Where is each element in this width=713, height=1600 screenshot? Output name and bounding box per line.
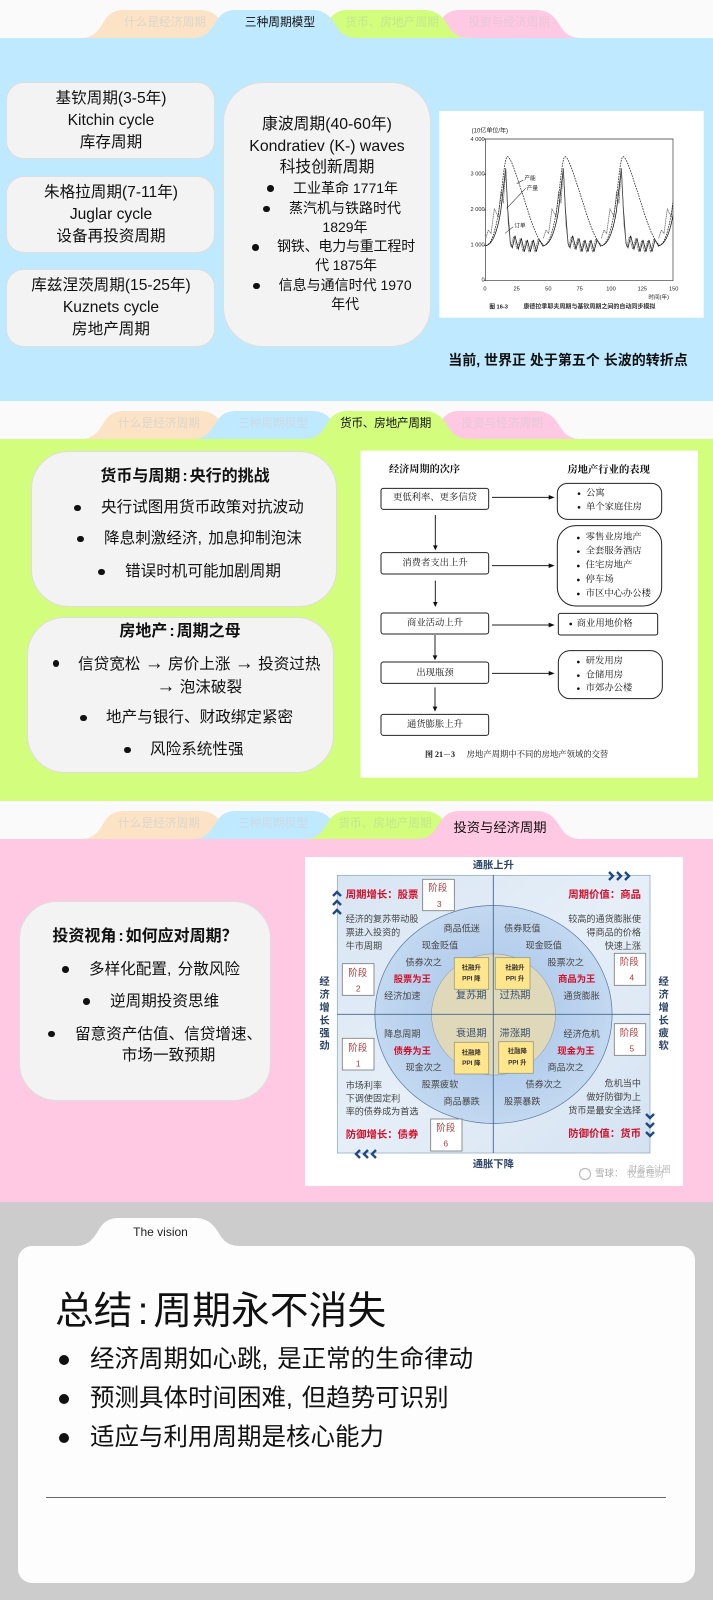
- chart: Kondratiev and Kitchin simulation: 时间(年): [648, 293, 669, 301]
- section: three cycle models: [0, 0, 713, 401]
- diagram: investment clock: 阶段: [620, 956, 639, 968]
- diagram: real estate sequence: 商业用地价格: [577, 617, 633, 629]
- diagram: investment clock: 疲: [658, 1026, 669, 1040]
- diagram: investment clock: 增: [319, 1001, 330, 1014]
- list item: 市场一致预期: [122, 1047, 215, 1064]
- list item: 逆周期投资思维: [110, 992, 219, 1010]
- diagram: investment clock: 票进入投资的: [346, 927, 400, 938]
- chart: Kondratiev and Kitchin simulation: 3 000: [471, 171, 485, 177]
- diagram: investment clock: 社融降: [462, 1048, 481, 1056]
- diagram: investment clock: 复苏期: [456, 988, 487, 1002]
- diagram: investment clock: 防御增长：债券: [346, 1128, 419, 1141]
- chart: Kondratiev and Kitchin simulation: 100: [606, 286, 616, 292]
- diagram: investment clock: 得商品的价格: [586, 927, 641, 938]
- card: money and the cycle: [31, 451, 337, 607]
- tab bar: [82, 811, 579, 839]
- diagram: investment clock: 通货膨胀: [564, 990, 600, 1001]
- diagram: investment clock: 债券次之: [406, 956, 442, 967]
- card heading: 康波周期(40-60年): [262, 116, 392, 133]
- card: Kuznets cycle: 库兹涅茨周期(15-25年): [31, 277, 191, 294]
- tab bar: 三种周期模型: [245, 16, 315, 29]
- list item: 多样化配置, 分散风险: [89, 960, 240, 978]
- diagram: real estate sequence: 市区中心办公楼: [586, 587, 652, 599]
- card heading: Kondratiev (K-) waves: [249, 138, 405, 154]
- chart: Kondratiev and Kitchin simulation: 1 000: [471, 243, 485, 249]
- list item: [263, 198, 401, 237]
- diagram: investment clock: PPI 降: [462, 1058, 481, 1067]
- chart: Kondratiev and Kitchin simulation: 康德拉季耶夫周期与基钦周期之间的自动同步模拟: [523, 303, 655, 311]
- diagram: real estate sequence: 经济周期的次序: [389, 462, 460, 476]
- chart: Kondratiev and Kitchin simulation: 0: [483, 286, 487, 292]
- card heading: 房地产:周期之母: [119, 623, 241, 640]
- diagram: investment clock: 下调使固定利: [346, 1092, 400, 1103]
- diagram: investment clock: 股票为王: [394, 973, 431, 984]
- list item: 适应与利用周期是核心能力: [90, 1424, 384, 1451]
- diagram: investment clock: 济: [658, 988, 669, 1001]
- diagram: investment clock: 阶段: [428, 882, 448, 894]
- diagram: real estate sequence: 研发用房: [586, 655, 623, 667]
- chart: Kondratiev and Kitchin simulation: 25: [514, 286, 520, 292]
- diagram: investment clock: 阶段: [348, 967, 368, 979]
- diagram: investment clock: 通胀上升: [473, 858, 514, 872]
- chart: Kondratiev and Kitchin simulation: 125: [638, 286, 647, 292]
- tab bar: 投资与经济周期: [461, 417, 543, 430]
- diagram: investment clock: 快速上涨: [605, 940, 641, 951]
- diagram: investment clock: 降息周期: [384, 1028, 420, 1039]
- section: summary: [0, 1202, 713, 1600]
- tab bar: 货币、房地产周期: [340, 417, 431, 430]
- diagram: investment clock: 通胀下降: [473, 1158, 515, 1170]
- diagram: investment clock: 经济危机: [564, 1028, 600, 1039]
- diagram: investment clock: 现金为王: [557, 1045, 595, 1056]
- list item: → 泡沫破裂: [156, 676, 242, 696]
- diagram: real estate sequence: 更低利率、更多信贷: [393, 491, 478, 503]
- tab bar: [82, 10, 579, 38]
- diagram: investment clock: 长: [658, 1014, 669, 1027]
- card heading: 货币与周期:央行的挑战: [100, 468, 270, 485]
- diagram: real estate sequence: 公寓: [586, 486, 605, 498]
- diagram: real estate sequence: 零售业房地产: [586, 531, 642, 543]
- tab bar: 货币、房地产周期: [345, 16, 439, 29]
- diagram: investment clock: 股票次之: [548, 956, 584, 967]
- card: Kuznets cycle: [6, 269, 215, 347]
- diagram: real estate sequence: 住宅房地产: [586, 559, 632, 571]
- section: money and real estate: [0, 401, 713, 801]
- tab: The vision: [78, 1218, 238, 1246]
- card: Juglar cycle: 设备再投资周期: [56, 228, 166, 244]
- card heading: 投资视角:如何应对周期？: [52, 928, 238, 945]
- diagram: investment clock: 股票疲软: [422, 1078, 458, 1089]
- diagram: investment clock: 济: [319, 988, 330, 1001]
- diagram: investment clock: 现金次之: [406, 1062, 442, 1073]
- card: Kitchin cycle: [6, 82, 215, 159]
- chart: Kondratiev and Kitchin simulation: 产能: [524, 174, 536, 182]
- diagram: investment clock: 牛市周期: [346, 940, 382, 951]
- list item: 降息刺激经济, 加息抑制泡沫: [104, 530, 302, 547]
- list item: 工业革命 1771年: [293, 180, 398, 196]
- diagram: investment clock: 长: [319, 1014, 330, 1027]
- diagram: investment clock: 5: [629, 1043, 634, 1053]
- diagram: investment clock: 软: [658, 1039, 669, 1052]
- diagram: investment clock: 债券贬值: [504, 923, 540, 934]
- diagram: real estate sequence: 通货膨胀上升: [407, 718, 463, 730]
- tab bar: [82, 411, 579, 439]
- diagram: investment clock: 阶段: [348, 1042, 368, 1054]
- diagram: investment clock: 滞涨期: [500, 1028, 530, 1040]
- diagram: investment clock: 周期价值：商品: [568, 888, 641, 901]
- list item: 代 1875年: [315, 257, 377, 273]
- diagram: investment clock: 社融升: [505, 962, 525, 972]
- diagram: real estate sequence: 出现瓶颈: [416, 666, 454, 678]
- diagram: investment clock: 牧童理财: [627, 1168, 664, 1179]
- list item: 蒸汽机与铁路时代: [289, 200, 401, 216]
- tab bar: 什么是经济周期: [118, 817, 200, 830]
- list item: 错误时机可能加剧周期: [125, 563, 281, 580]
- chart: Kondratiev and Kitchin simulation: (10亿单位/年): [472, 127, 508, 135]
- diagram: investment clock: 现金贬值: [526, 940, 562, 951]
- diagram: real estate sequence: 停车场: [586, 573, 614, 585]
- tab bar: 投资与经济周期: [468, 16, 550, 29]
- diagram: investment clock: 2: [356, 983, 361, 993]
- list item: 信息与通信时代 1970: [279, 276, 412, 292]
- tab bar: 投资与经济周期: [453, 820, 547, 835]
- chart: Kondratiev and Kitchin simulation: 产量: [527, 184, 538, 192]
- card: Kondratiev waves: [223, 82, 431, 347]
- tab bar: 什么是经济周期: [124, 16, 206, 29]
- diagram: investment clock: 3: [437, 899, 442, 909]
- card: investor view: [19, 901, 271, 1101]
- list item: 经济周期如心跳, 是正常的生命律动: [90, 1346, 473, 1372]
- list item: [52, 653, 320, 698]
- diagram: investment clock: 经: [319, 975, 330, 988]
- chart: Kondratiev and Kitchin simulation: [439, 111, 704, 318]
- list item: 地产与银行、财政绑定紧密: [106, 709, 293, 726]
- diagram: investment clock: PPI 升: [508, 1058, 527, 1066]
- chart: Kondratiev and Kitchin simulation: 150: [669, 286, 678, 292]
- diagram: investment clock: 商品为王: [558, 973, 595, 984]
- tab bar: 货币、房地产周期: [338, 817, 432, 830]
- chart: Kondratiev and Kitchin simulation: 50: [545, 286, 551, 292]
- diagram: real estate sequence: 房地产周期中不同的房地产领域的交替: [467, 749, 608, 759]
- diagram: investment clock: 1: [356, 1058, 361, 1068]
- diagram: real estate sequence: 单个家庭住房: [586, 500, 642, 512]
- card heading: 科技创新周期: [280, 159, 374, 176]
- card: real estate: [27, 617, 334, 773]
- card: Kuznets cycle: Kuznets cycle: [63, 299, 159, 316]
- diagram: investment clock: 增: [658, 1001, 669, 1014]
- panel: summary card: [18, 1218, 695, 1583]
- tab bar: 三种周期模型: [238, 817, 308, 830]
- list item: [252, 237, 415, 276]
- diagram: real estate sequence: 消费者支出上升: [402, 556, 468, 568]
- list item: [48, 1024, 262, 1066]
- diagram: real estate sequence: 市郊办公楼: [586, 682, 633, 694]
- title: 总结:周期永不消失: [55, 1290, 386, 1333]
- diagram: investment clock: 防御价值：货币: [568, 1127, 641, 1140]
- caption: current position: 当前, 世界正 处于第五个 长波的转折点: [448, 352, 688, 368]
- diagram: investment clock: 现金贬值: [422, 940, 458, 951]
- diagram: investment clock: 雪球：: [595, 1168, 624, 1180]
- diagram: real estate sequence: 商业活动上升: [407, 616, 463, 628]
- diagram: investment clock: PPI 升: [506, 974, 525, 982]
- diagram: investment clock: 经: [658, 975, 669, 988]
- diagram: real estate sequence: [360, 450, 698, 778]
- diagram: investment clock: [305, 857, 683, 1186]
- tab label: The vision: [133, 1224, 188, 1238]
- diagram: investment clock: 衰退期: [456, 1026, 487, 1040]
- card heading: [249, 115, 405, 176]
- list item: [253, 276, 412, 314]
- tab bar: 三种周期模型: [238, 417, 308, 430]
- list item: 风险系统性强: [150, 741, 244, 758]
- diagram: investment clock: 股票暴跌: [504, 1097, 540, 1107]
- chart: Kondratiev and Kitchin simulation: 图 16-3: [489, 303, 508, 310]
- card: Kitchin cycle: 库存周期: [80, 134, 142, 150]
- diagram: investment clock: 商品暴跌: [444, 1096, 480, 1107]
- diagram: investment clock: 率的债券成为首选: [346, 1106, 418, 1117]
- card background: [18, 1246, 694, 1583]
- chart: Kondratiev and Kitchin simulation: 0: [482, 278, 485, 284]
- stage boxes: [342, 879, 646, 1151]
- diagram: investment clock: 社融降: [508, 1046, 527, 1055]
- diagram: investment clock: 周期增长：股票: [346, 888, 418, 901]
- list item: 留意资产估值、信贷增速、: [75, 1026, 262, 1042]
- diagram: investment clock: 6: [443, 1138, 448, 1148]
- chart: Kondratiev and Kitchin simulation: 2 000: [471, 207, 485, 213]
- chart: Kondratiev and Kitchin simulation: 订单: [514, 222, 526, 230]
- diagram: investment clock: 危机当中: [605, 1077, 641, 1088]
- card: Kitchin cycle: 基钦周期(3-5年): [56, 90, 166, 106]
- diagram: investment clock: 劲: [319, 1039, 330, 1052]
- diagram: investment clock: 债券为王: [394, 1045, 431, 1056]
- list item: 央行试图用货币政策对抗波动: [101, 499, 304, 516]
- card: Juglar cycle: [6, 176, 215, 253]
- list item: 预测具体时间困难, 但趋势可识别: [90, 1385, 449, 1412]
- tab bar: 什么是经济周期: [118, 417, 200, 430]
- list item: 年代: [331, 296, 359, 312]
- diagram: investment clock: 商品低迷: [444, 923, 480, 934]
- list item: 信贷宽松 → 房价上涨 → 投资过热: [78, 653, 320, 674]
- diagram: investment clock: 阶段: [436, 1122, 456, 1134]
- diagram: investment clock: PPI 降: [462, 974, 481, 982]
- chart: Kondratiev and Kitchin simulation: 75: [577, 286, 583, 292]
- diagram: investment clock: 市场利率: [346, 1079, 382, 1090]
- diagram: investment clock: 过热期: [500, 988, 530, 1002]
- diagram: investment clock: 商品次之: [548, 1062, 584, 1073]
- diagram: investment clock: 经济加速: [384, 990, 420, 1001]
- diagram: real estate sequence: 房地产行业的表现: [567, 463, 651, 476]
- card: Kuznets cycle: 房地产周期: [72, 321, 150, 338]
- card: Kitchin cycle: Kitchin cycle: [68, 112, 154, 128]
- diagram: investment clock: 债券次之: [526, 1078, 562, 1089]
- card: Juglar cycle: 朱格拉周期(7-11年): [44, 184, 178, 200]
- diagram: investment clock: 做好防御为上: [586, 1091, 641, 1102]
- section: investment and the cycle: [0, 801, 713, 1202]
- diagram: real estate sequence: 全套服务酒店: [586, 545, 642, 557]
- diagram: investment clock: 较高的通货膨胀使: [568, 913, 641, 924]
- list item: 钢铁、电力与重工程时: [277, 238, 415, 254]
- diagram: investment clock: 4: [629, 973, 634, 983]
- divider: [46, 1497, 666, 1498]
- diagram: real estate sequence: 仓储用房: [586, 668, 623, 680]
- diagram: investment clock: 社融升: [462, 962, 481, 972]
- chart: Kondratiev and Kitchin simulation: 4 000: [471, 137, 485, 143]
- diagram: investment clock: 强: [319, 1028, 330, 1040]
- diagram: investment clock: 财务会计圈: [629, 1164, 670, 1174]
- diagram: real estate sequence: 图 21－3: [425, 750, 455, 759]
- list item: 1829年: [322, 219, 368, 235]
- diagram: investment clock: 货币是最安全选择: [568, 1105, 641, 1116]
- diagram: investment clock: 阶段: [620, 1027, 639, 1039]
- diagram: investment clock: 经济的复苏带动股: [346, 913, 418, 924]
- card: Juglar cycle: Juglar cycle: [70, 206, 152, 222]
